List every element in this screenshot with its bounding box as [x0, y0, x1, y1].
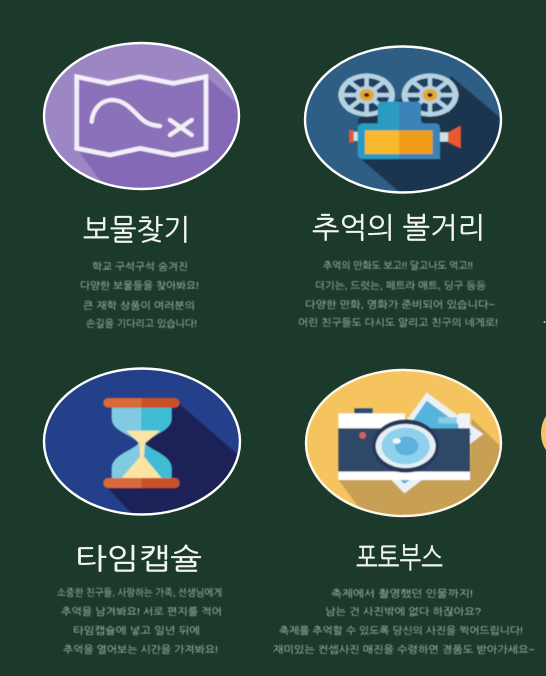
icon: cropped next circle edge: [541, 416, 546, 450]
text block: photo booth: [273, 588, 535, 656]
projector body: [349, 130, 354, 143]
icon: camera with photo: [304, 368, 502, 518]
text block: time capsule: [57, 587, 222, 656]
text block: memory attractions: 더기는, 드럿는, 페트라 매트, 딩구 등등: [315, 280, 487, 292]
panel: time capsule: [44, 368, 263, 656]
text block: time capsule: 추억을 열어보는 시간을 가져봐요!: [63, 644, 218, 656]
icon: film projector: [304, 45, 502, 194]
text block: treasure hunt: 학교 구석구석 숨겨진: [92, 261, 188, 273]
panel: photo booth: [273, 370, 535, 656]
heading: time capsule: 타임캡슐: [75, 544, 202, 576]
text block: time capsule: 소중한 친구들, 사랑하는 가족, 선생님에게: [57, 587, 222, 599]
text block: treasure hunt: 손길을 기다리고 있습니다!: [86, 318, 197, 330]
text block: photo booth: 축제에서 촬영했던 인물까지!: [331, 588, 473, 600]
text block: photo booth: 남는 건 사진밖에 없다 하잖아요?: [325, 606, 481, 618]
heading: memory attractions: 추억의 볼거리: [312, 213, 485, 245]
reels: [338, 73, 395, 117]
heading: treasure hunt: 보물찾기: [83, 215, 190, 247]
text block: photo booth: 재미있는 컨셉사진 매진을 수령하면 경품도 받아가세요~: [273, 644, 535, 656]
text block: treasure hunt: [80, 261, 199, 330]
panel: memory attractions: [298, 45, 502, 328]
panel: treasure hunt: [44, 43, 263, 330]
heading: photo booth: 포토부스: [356, 543, 443, 575]
cropped text fragment: [544, 321, 546, 323]
text block: time capsule: 추억을 남겨봐요! 서로 편지를 적어: [61, 606, 222, 618]
text block: photo booth: 축제를 추억할 수 있도록 당신의 사진을 찍어드립니다!: [279, 625, 523, 637]
text block: memory attractions: 추억의 만화도 보고!! 달고나도 먹고!!: [323, 260, 473, 272]
text block: memory attractions: [298, 260, 498, 329]
text block: treasure hunt: 큰 재학 상품이 여러분의: [83, 300, 195, 312]
text block: memory attractions: 어린 친구들도 다시도 알리고 친구의 네게로!: [298, 317, 498, 329]
icon: hourglass: [42, 367, 242, 516]
text block: time capsule: 타임캡슐에 넣고 일년 뒤에: [73, 625, 200, 637]
icon: treasure map: [42, 42, 240, 190]
text block: treasure hunt: 다양한 보물들을 찾아봐요!: [80, 280, 199, 292]
text block: memory attractions: 다양한 만화, 영화가 준비되어 있습니다~: [305, 299, 495, 311]
